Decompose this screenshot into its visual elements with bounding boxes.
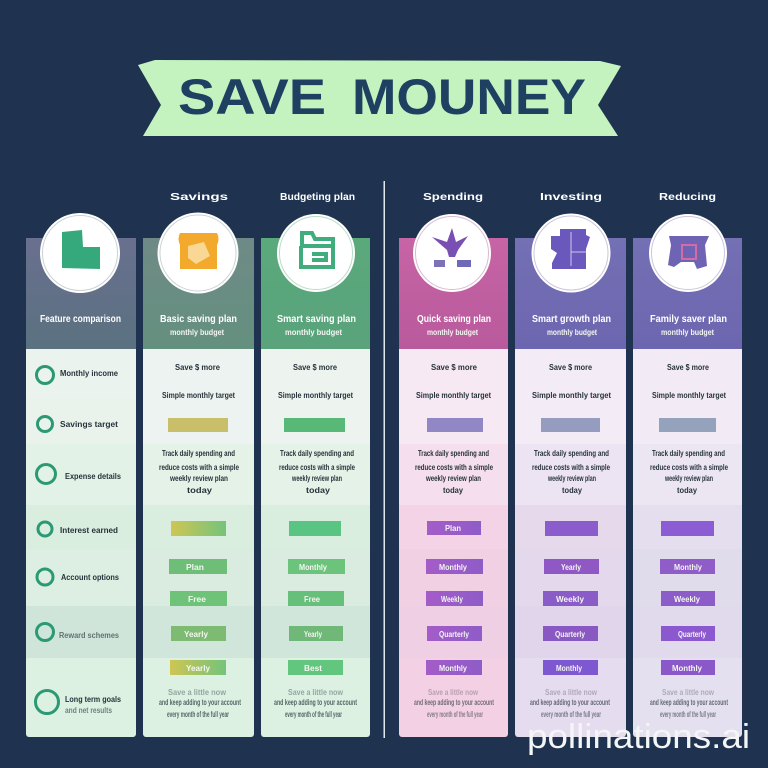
plan details: Save $ more (175, 363, 221, 372)
panel: feature labels column: Expense details (65, 472, 121, 481)
panel: column 5: Yearly (561, 563, 581, 572)
description: weekly review plan (169, 474, 228, 483)
footer note: Save a little now (662, 688, 715, 697)
panel: column 4: Quarterly (439, 630, 469, 639)
panel: column 3: Yearly (304, 630, 322, 639)
description: Track daily spending and (162, 449, 235, 458)
value bars (289, 521, 341, 536)
footer note (414, 688, 494, 719)
title banner: MOUNEY (352, 69, 586, 125)
description: reduce costs with a simple (415, 463, 493, 472)
panel: column 4: Plan (445, 524, 461, 533)
footer note: and keep adding to your account (530, 698, 610, 707)
icon: green folder (301, 233, 333, 267)
panel: column 2: Free (188, 595, 207, 604)
description: reduce costs with a simple (279, 463, 355, 472)
plan heading: Quick saving plan (417, 314, 491, 325)
value bars (545, 521, 598, 536)
panel: column 5: monthly budget (547, 328, 597, 337)
bar (659, 418, 716, 432)
column headings: Budgeting plan (280, 192, 355, 203)
value bars (427, 521, 481, 535)
panel: column 2 (143, 212, 254, 737)
panel: feature labels column: Interest earned (60, 526, 118, 535)
panel: column 2: Simple monthly target (162, 391, 235, 400)
panel: column 6: Simple monthly target (652, 391, 726, 400)
plan details: Save $ more (431, 363, 478, 372)
plan details: Save $ more (293, 363, 338, 372)
plan heading: Smart saving plan (277, 314, 356, 325)
panel: column 3: Best (304, 664, 322, 673)
column headings: Savings (170, 192, 229, 203)
bar (284, 418, 345, 432)
icon: badge (158, 212, 238, 294)
description: Track daily spending and (418, 449, 489, 458)
panel: column 2: Yearly (186, 664, 211, 673)
description: weekly review plan (664, 474, 713, 483)
watermark: pollinations.ai (527, 718, 750, 756)
footer note (274, 688, 357, 719)
bar (427, 418, 483, 432)
footer note (159, 688, 241, 719)
value bars (661, 521, 714, 536)
footer note: and keep adding to your account (159, 698, 241, 707)
column headings: Reducing (659, 192, 716, 203)
icon: badge (649, 214, 727, 292)
panel: column 6: Monthly (672, 664, 703, 673)
panel: column 4: monthly budget (427, 328, 478, 337)
row labels with ring icons (36, 366, 58, 714)
footer note (530, 688, 610, 719)
description: weekly review plan (425, 474, 481, 483)
description: Track daily spending and (534, 449, 609, 458)
footer note: every month of the full year (167, 710, 229, 719)
footer note: every month of the full year (541, 710, 601, 719)
panel: column 3: Free (304, 595, 321, 604)
panel: column 3: monthly budget (285, 328, 342, 337)
centre divider (384, 181, 385, 738)
panel: column 6: Quarterly (678, 630, 706, 639)
description: today (562, 486, 583, 495)
description: Track daily spending and (280, 449, 354, 458)
footer note: Save a little now (288, 688, 344, 697)
panel: column 5: Monthly (556, 664, 582, 673)
bar (168, 418, 228, 432)
panel: column 4: Monthly (439, 664, 467, 673)
panel: column 3 (261, 214, 370, 737)
plan heading: Basic saving plan (160, 314, 237, 325)
icon: badge (413, 214, 491, 292)
panel: column 5: Simple monthly target (532, 391, 611, 400)
column headings: Spending (423, 192, 483, 203)
panel: column 6 (633, 214, 742, 737)
panel: column 2: Plan (186, 563, 204, 572)
plan heading: Smart growth plan (532, 314, 611, 325)
description: weekly review plan (547, 474, 596, 483)
icon: purple house (668, 236, 709, 269)
description: reduce costs with a simple (650, 463, 728, 472)
panel: column 2: Yearly (184, 630, 209, 639)
value bars (171, 521, 226, 536)
description: today (677, 486, 698, 495)
panel: feature labels column: Monthly income (60, 369, 119, 378)
footer note: Save a little now (545, 688, 598, 697)
panel: feature labels column: Account options (61, 573, 120, 582)
title banner: SAVE (178, 69, 326, 125)
footer note (650, 688, 728, 719)
description: today (187, 486, 213, 495)
footer note: Save a little now (428, 688, 479, 697)
panel: feature labels column: and net results (65, 706, 112, 715)
footer note: every month of the full year (285, 710, 342, 719)
footer note: Save a little now (168, 688, 227, 697)
description (650, 449, 728, 495)
bar (541, 418, 600, 432)
panel: column 4: Monthly (439, 563, 467, 572)
panel: feature labels column: Reward schemes (59, 631, 119, 640)
description (159, 449, 239, 495)
panel: column 6: monthly budget (661, 328, 714, 337)
icon: badge (532, 214, 610, 292)
description: reduce costs with a simple (532, 463, 610, 472)
panel: column 2: monthly budget (170, 328, 224, 337)
panel: column 3: Monthly (299, 563, 327, 572)
panel: feature labels column: Savings target (60, 420, 118, 429)
icon: feature badge (40, 213, 120, 293)
description: weekly review plan (291, 474, 342, 483)
panel: column 4: Simple monthly target (416, 391, 491, 400)
panel: column 5: Quarterly (555, 630, 585, 639)
description: today (306, 486, 331, 495)
icon: purple sprout (432, 228, 471, 267)
icon: green block (62, 230, 100, 269)
feature heading: Feature comparison (40, 314, 121, 325)
panel: column 5 (515, 214, 626, 737)
panel: column 5: Weekly (556, 595, 585, 604)
description (532, 449, 610, 495)
footer note: and keep adding to your account (274, 698, 357, 707)
footer note: every month of the full year (660, 710, 716, 719)
description (279, 449, 355, 495)
panel: feature labels column: Long term goals (65, 695, 121, 704)
description: Track daily spending and (652, 449, 725, 458)
panel: column 4: Weekly (441, 595, 463, 604)
plan heading: Family saver plan (650, 314, 727, 325)
title banner (138, 60, 621, 136)
panel: column 6: Monthly (674, 563, 702, 572)
column headings (170, 192, 716, 203)
panel: column 6: Weekly (674, 595, 701, 604)
icon: orange toast (178, 233, 218, 269)
description: reduce costs with a simple (159, 463, 239, 472)
panel: column 3: Simple monthly target (278, 391, 353, 400)
description (415, 449, 493, 495)
icon: badge (277, 214, 355, 292)
plan details: Save $ more (667, 363, 709, 372)
panel: feature labels column (26, 213, 136, 737)
description: today (443, 486, 464, 495)
footer note: every month of the full year (427, 710, 483, 719)
icon: purple block (551, 229, 590, 269)
column headings: Investing (540, 192, 602, 203)
panel: column 4 (399, 214, 508, 737)
plan details: Save $ more (549, 363, 593, 372)
footer note: and keep adding to your account (414, 698, 494, 707)
